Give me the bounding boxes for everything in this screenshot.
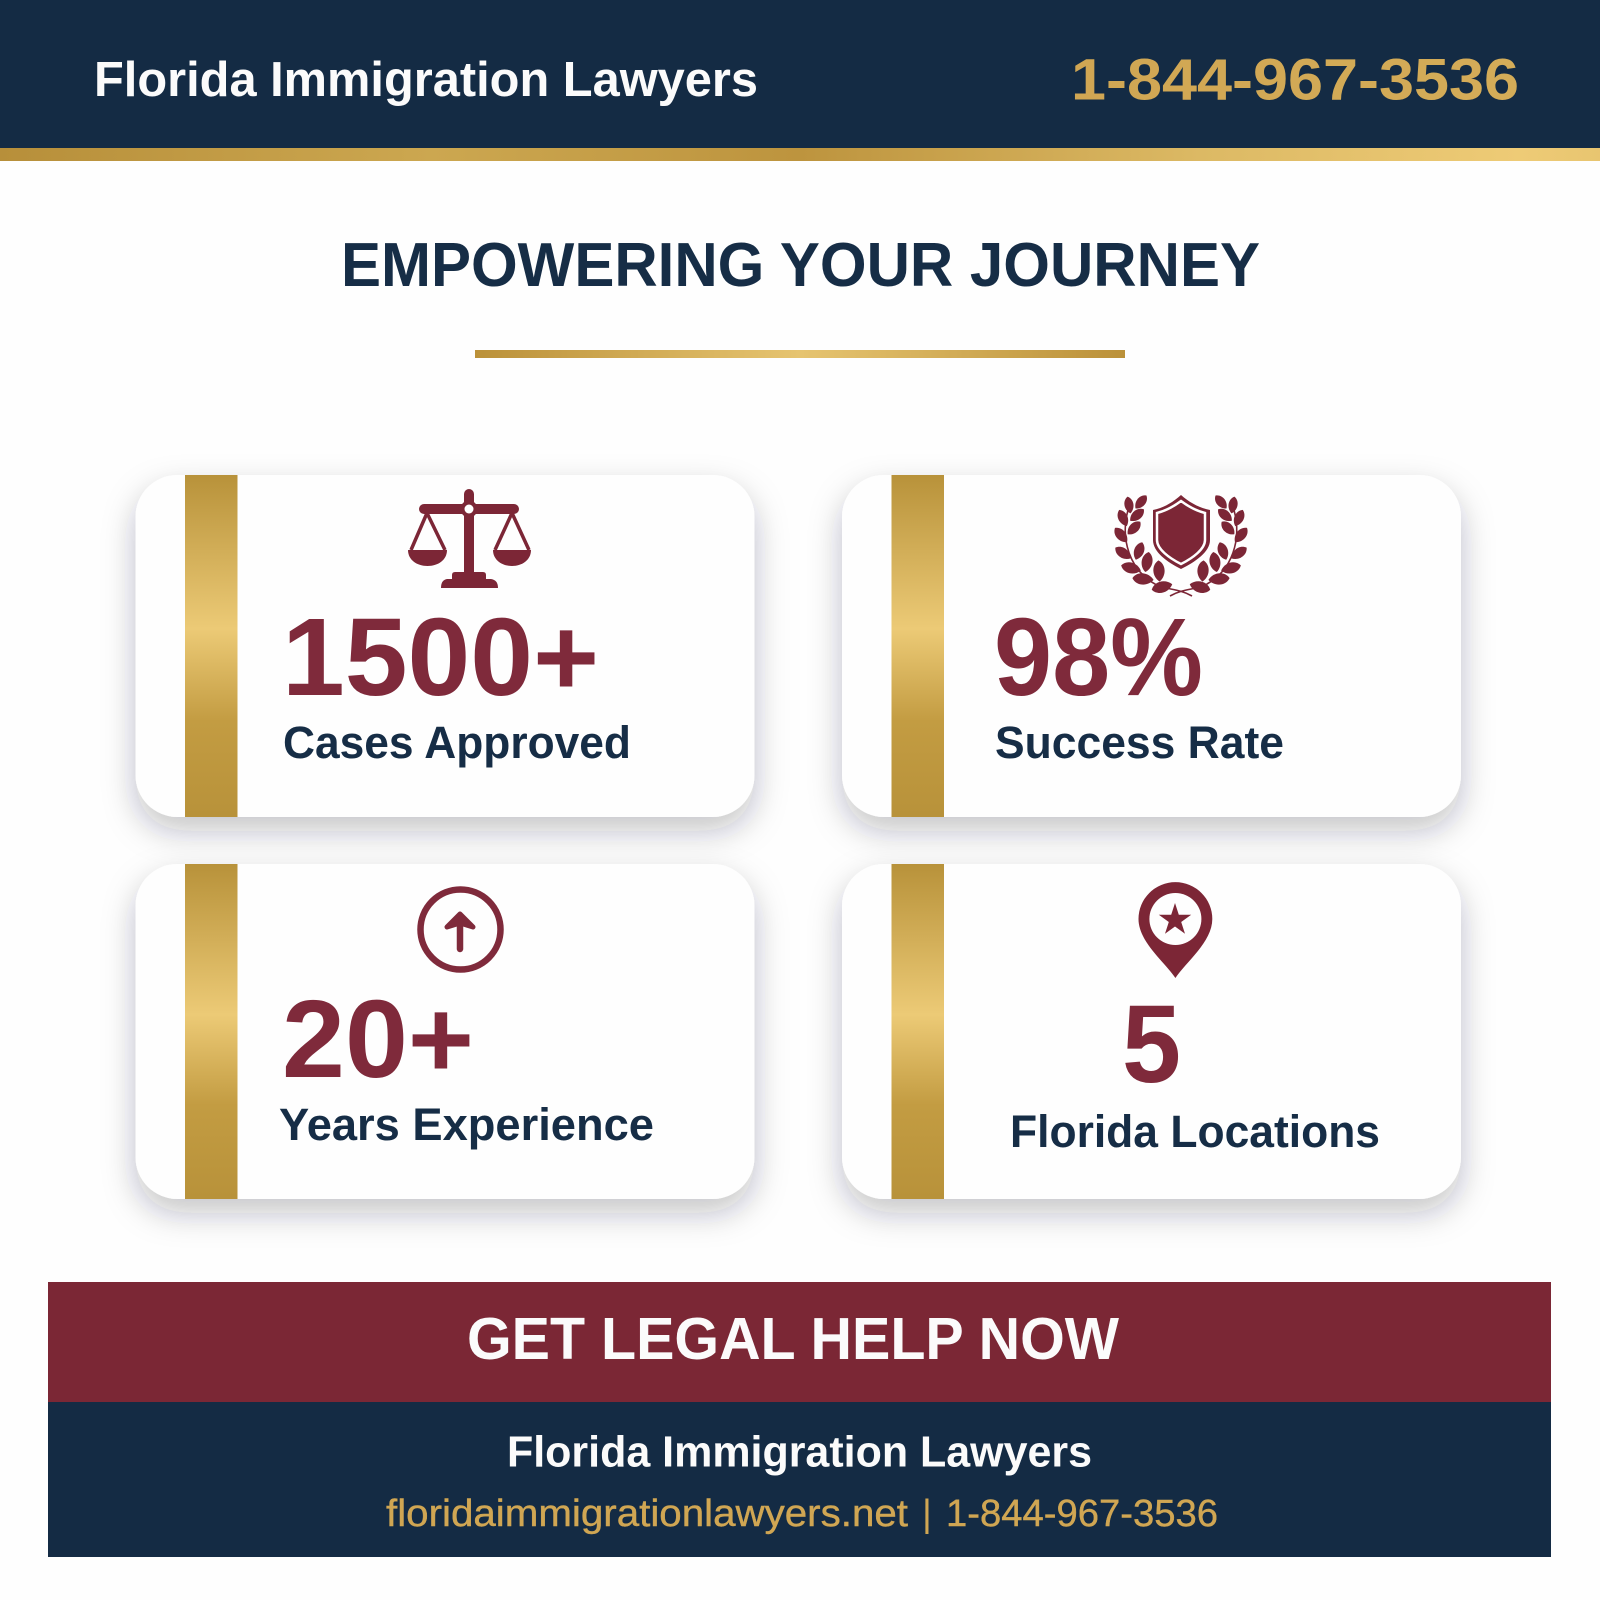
main heading: EMPOWERING YOUR JOURNEY	[341, 231, 1260, 300]
header firm name: Florida Immigration Lawyers	[94, 53, 758, 107]
stat value: 5	[1122, 983, 1181, 1106]
icon: scales of justice	[408, 489, 531, 588]
icon: map pin with star	[1138, 882, 1212, 978]
footer separator: |	[922, 1493, 932, 1535]
call to action text: GET LEGAL HELP NOW	[467, 1306, 1119, 1372]
stat value: 1500+	[282, 596, 599, 719]
panel: cases approved	[136, 475, 754, 817]
footer phone: 1-844-967-3536	[946, 1493, 1218, 1535]
panel: success rate	[842, 475, 1461, 817]
panel: florida locations	[842, 864, 1461, 1199]
header band	[0, 0, 1600, 161]
stat value: 98%	[994, 596, 1203, 719]
heading gold divider	[475, 350, 1125, 358]
stat label: Success Rate	[995, 717, 1284, 768]
panel: years experience	[136, 864, 754, 1199]
icon: shield with laurel wreath	[1111, 493, 1251, 596]
footer firm name: Florida Immigration Lawyers	[507, 1428, 1092, 1476]
call to action banner	[48, 1282, 1551, 1402]
footer contact panel	[48, 1402, 1551, 1557]
stat value: 20+	[282, 978, 474, 1101]
stat label: Florida Locations	[1010, 1106, 1380, 1157]
footer website: floridaimmigrationlawyers.net	[386, 1493, 908, 1535]
header gold bar	[0, 148, 1600, 161]
stat label: Cases Approved	[283, 717, 631, 768]
stat label: Years Experience	[279, 1099, 654, 1150]
icon: upward arrow in circle	[420, 890, 500, 970]
header phone number: 1-844-967-3536	[1071, 48, 1519, 112]
